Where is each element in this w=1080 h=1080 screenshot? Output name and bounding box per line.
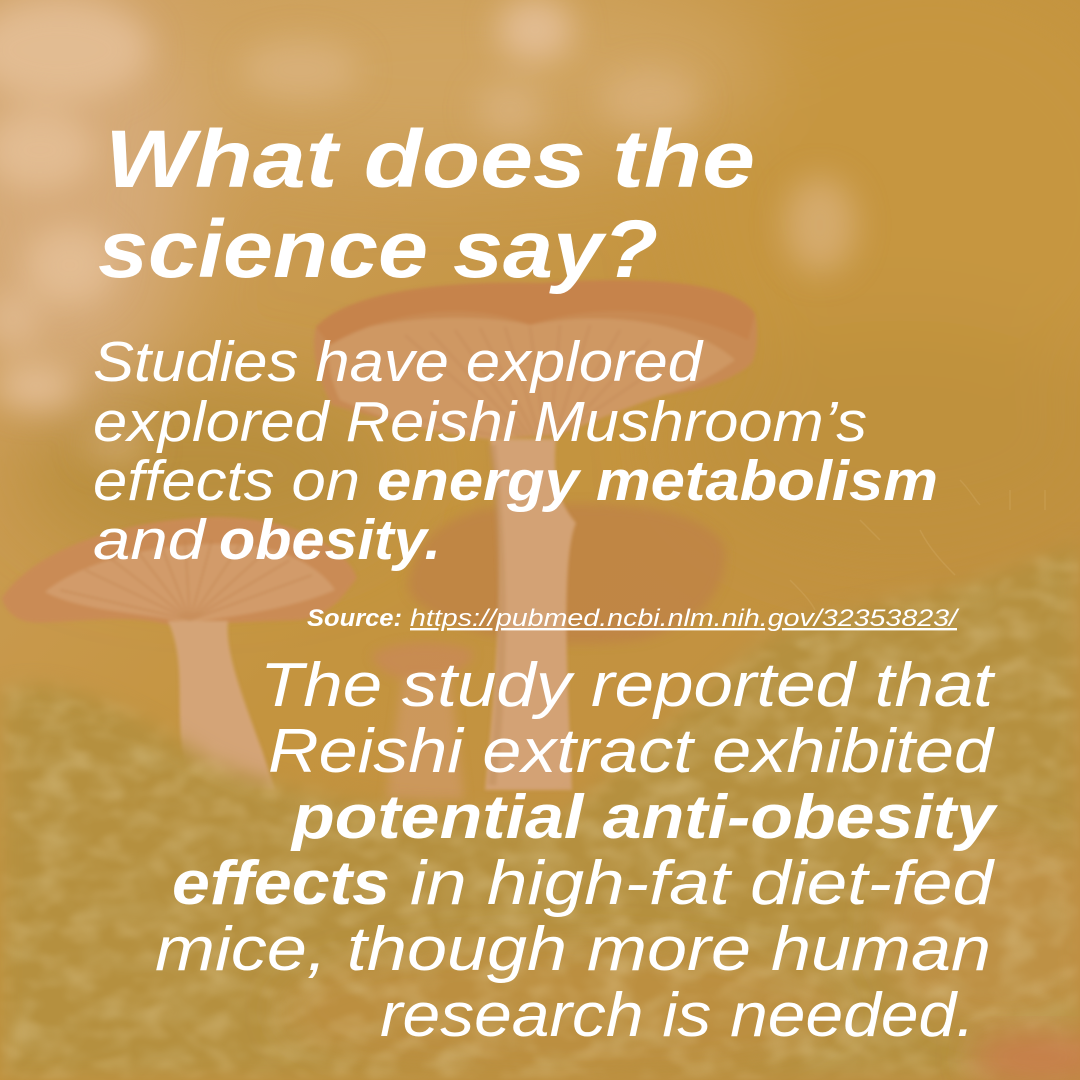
wisps of moss <box>790 480 1045 610</box>
title: science say? <box>98 204 658 295</box>
text block: studies intro: energy metabolism <box>377 449 938 513</box>
text block: study findings: The study reported that <box>260 651 996 720</box>
text block: study findings: mice, though more human <box>155 915 991 984</box>
title: What does the <box>105 114 755 205</box>
text block: studies intro: Studies have explored <box>93 330 704 394</box>
text block: study findings: potential anti-obesity <box>290 783 999 852</box>
text block: studies intro <box>93 330 938 572</box>
text block: studies intro: and <box>93 508 208 572</box>
icon: rear mushrooms <box>372 504 725 800</box>
source citation: Source: <box>307 605 402 632</box>
icon: large central mushroom <box>314 280 757 790</box>
title <box>98 114 755 295</box>
text block: study findings: effects <box>172 849 390 918</box>
icon: left mushroom <box>2 517 357 790</box>
text block: study findings: Reishi extract exhibited <box>268 717 996 786</box>
text block: study findings: research is needed. <box>380 981 975 1050</box>
moss foreground <box>0 552 1080 1080</box>
text block: studies intro: effects on <box>93 449 360 513</box>
text block: study findings <box>155 651 999 1050</box>
source citation: https://pubmed.ncbi.nlm.nih.gov/32353823/ <box>410 605 960 632</box>
text block: studies intro: obesity. <box>219 508 441 572</box>
text block: studies intro: explored Reishi Mushroom’s <box>93 390 867 454</box>
text block: study findings: in high-fat diet-fed <box>410 849 996 918</box>
